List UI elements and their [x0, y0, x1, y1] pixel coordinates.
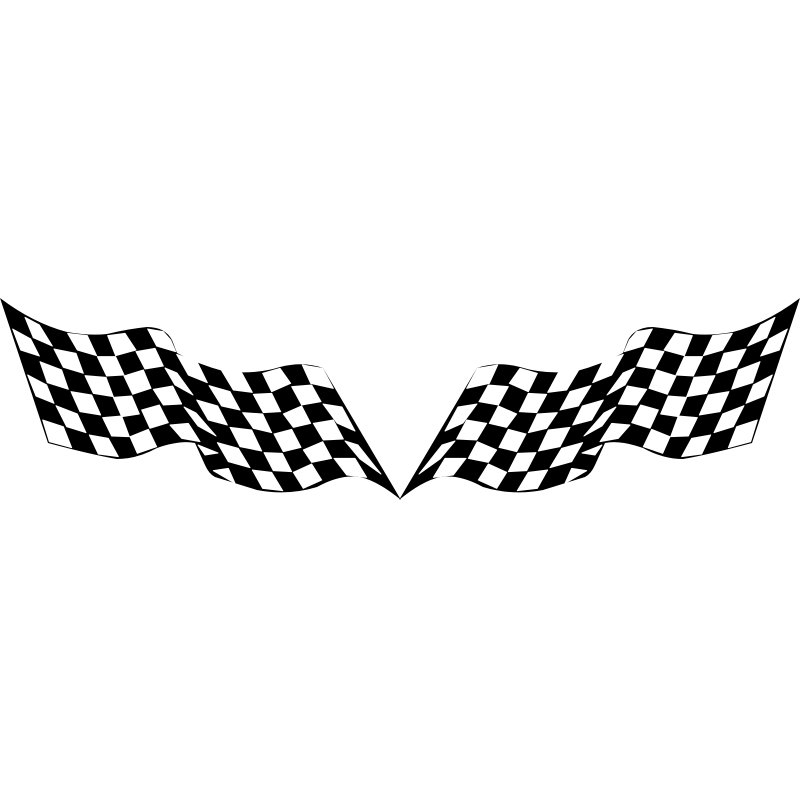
- icon: left checkered flag: [0, 298, 401, 500]
- icon: right checkered flag: [399, 298, 800, 500]
